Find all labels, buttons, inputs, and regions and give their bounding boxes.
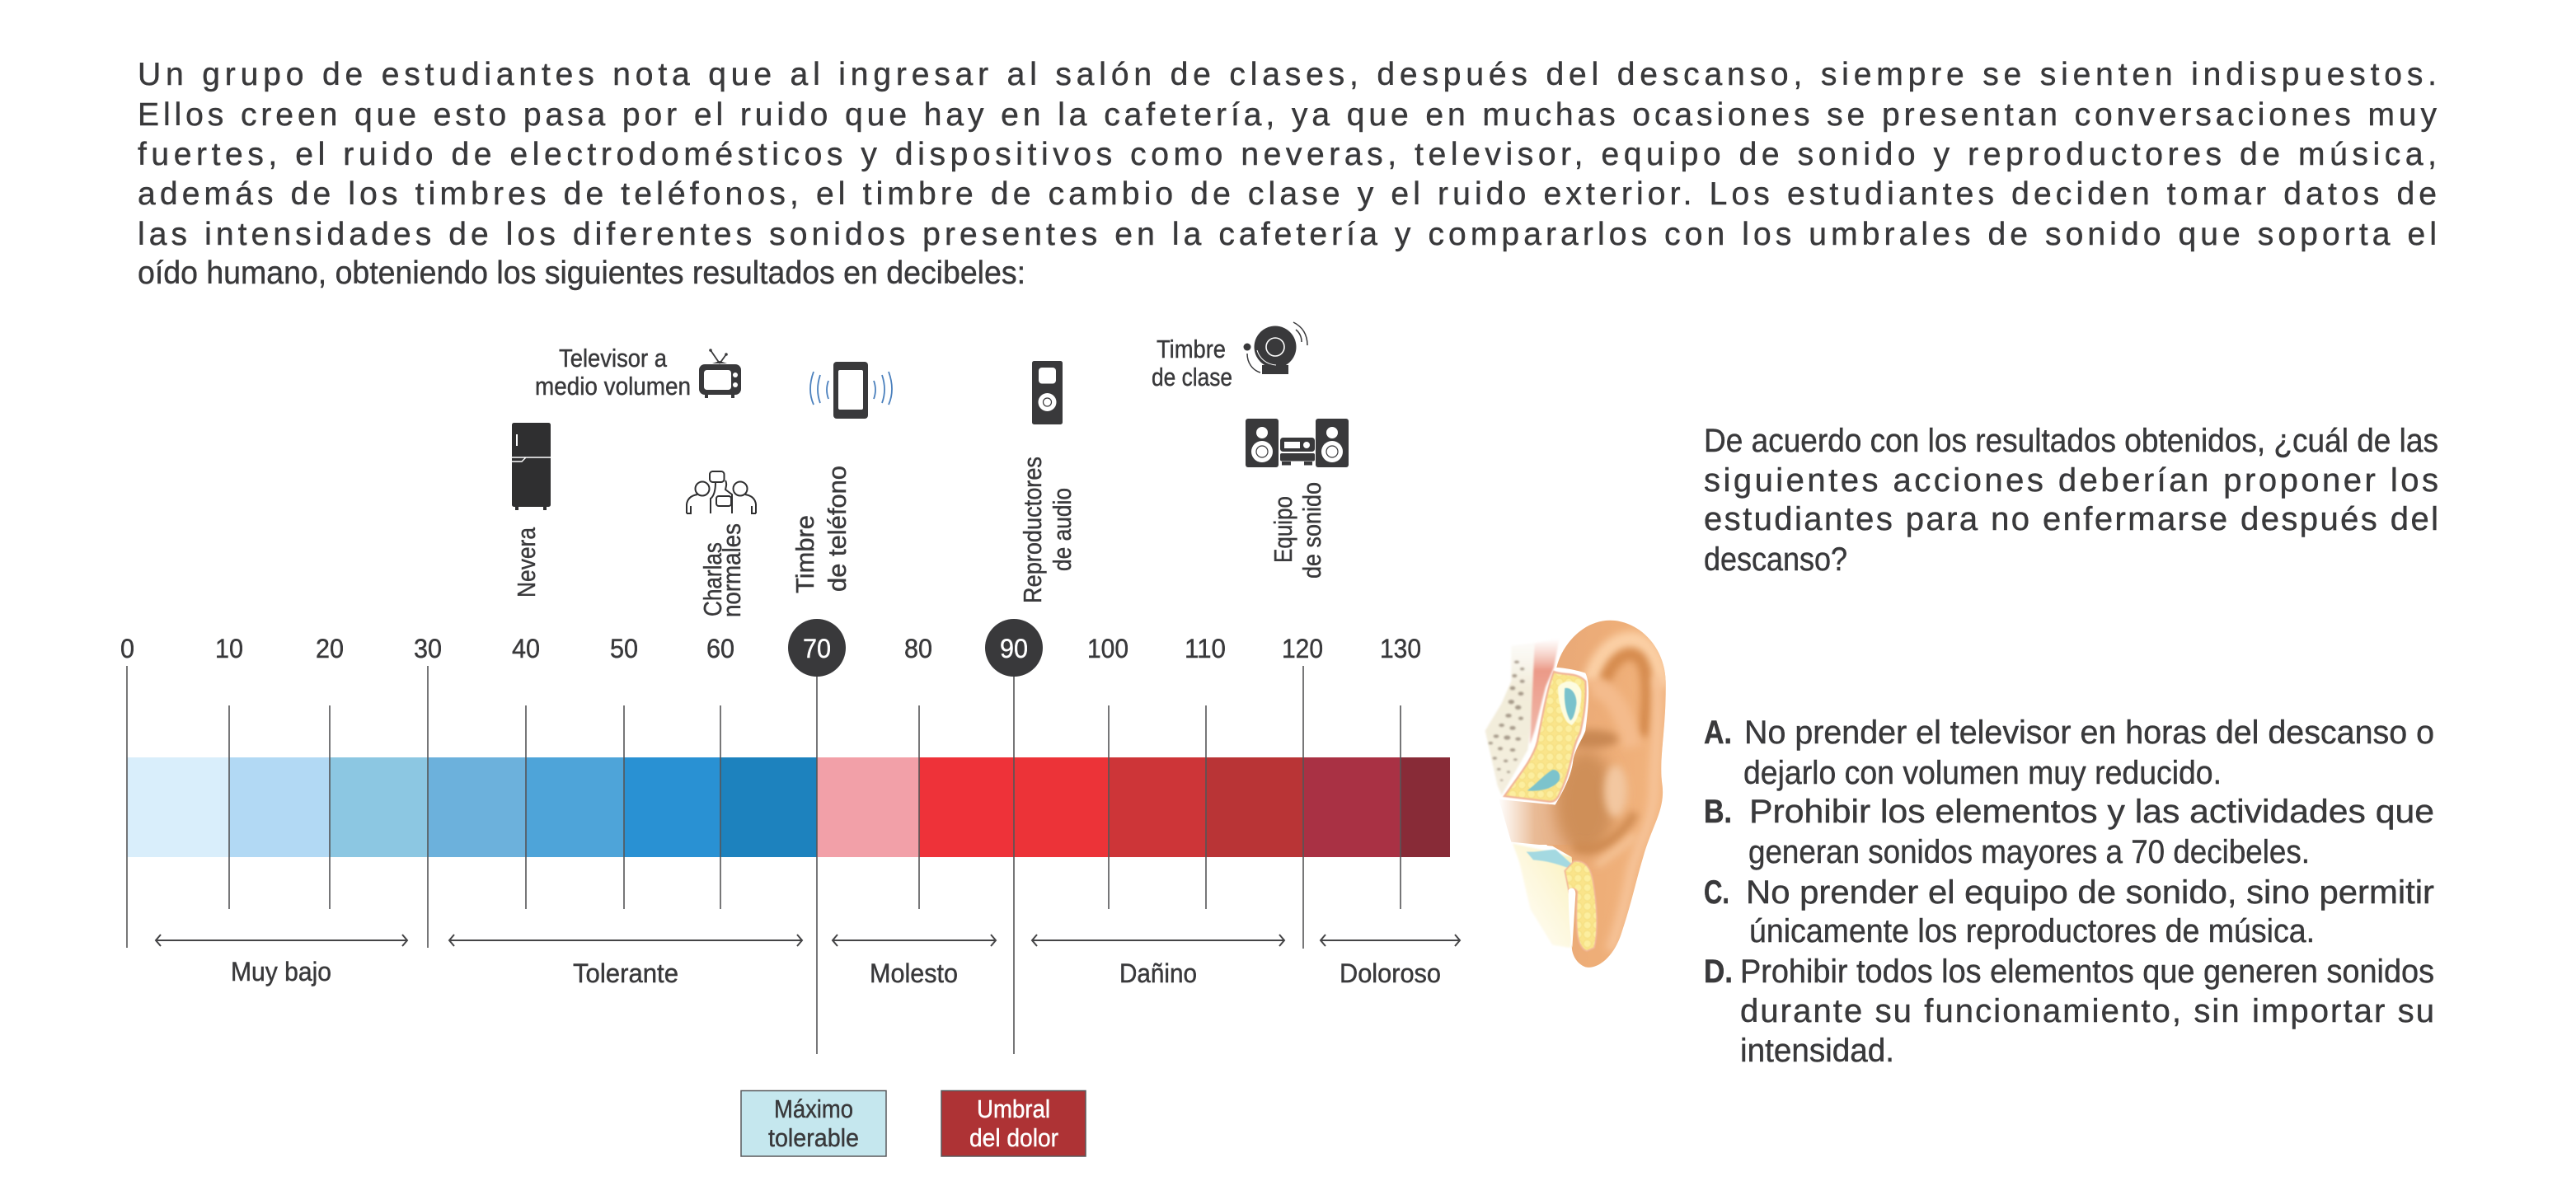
- icon: people talking: [687, 471, 756, 513]
- scale numbers: 50: [610, 634, 638, 663]
- scale numbers: 100: [1087, 634, 1128, 663]
- icon: ringing phone: [810, 362, 892, 419]
- option A: [1704, 715, 2434, 791]
- label: Charlas normales: normales: [717, 523, 746, 617]
- scale numbers: 0: [120, 634, 134, 663]
- intro paragraph: las intensidades de los diferentes sonidos presentes en la cafetería y compararlos con los umbrales de sonido que soporta el: [138, 217, 2437, 252]
- label: Reproductores de audio: Reproductores: [1018, 457, 1047, 603]
- question text: descanso?: [1704, 541, 1847, 578]
- legend box: maximum tolerable: tolerable: [768, 1123, 859, 1152]
- intro paragraph: fuertes, el ruido de electrodomésticos y dispositivos como neveras, televisor, equipo de sonido y reproductores de música,: [138, 137, 2437, 172]
- label: Timbre de teléfono: Timbre: [791, 515, 819, 593]
- scale numbers: 80: [904, 634, 932, 663]
- legend box: pain threshold: [941, 1091, 1086, 1156]
- label: Timbre de clase: de clase: [1152, 363, 1232, 391]
- scale numbers: 120: [1282, 634, 1323, 663]
- scale numbers: 10: [215, 634, 243, 663]
- label: Televisor a medio volumen: Televisor a: [559, 344, 668, 373]
- scale numbers: 130: [1380, 634, 1421, 663]
- label: Equipo de sonido: [1269, 482, 1326, 579]
- label: Nevera: Nevera: [512, 527, 541, 598]
- option A: dejarlo con volumen muy reducido.: [1743, 755, 2222, 791]
- scale numbers: 60: [706, 634, 734, 663]
- scale tick lines: [127, 666, 1401, 1054]
- scale circles for 70 and 90: [788, 619, 1043, 677]
- scale numbers: 40: [512, 634, 540, 663]
- scale numbers: 110: [1185, 634, 1226, 663]
- range labels: Dañino: [1119, 958, 1197, 988]
- option A: A.: [1704, 715, 1732, 751]
- label: Reproductores de audio: [1018, 457, 1077, 603]
- illustration: ear cross-section: [1485, 616, 1673, 972]
- legend box: maximum tolerable: [741, 1091, 886, 1156]
- decibel colour bar: [127, 757, 1450, 857]
- intro paragraph: Un grupo de estudiantes nota que al ingresar al salón de clases, después del descanso, siempre se sienten indispuestos.: [138, 57, 2437, 92]
- scale numbers: 70: [803, 634, 831, 663]
- intro paragraph: oído humano, obteniendo los siguientes resultados en decibeles:: [138, 255, 1025, 291]
- icon: refrigerator: [512, 423, 551, 510]
- scale numbers: 30: [414, 634, 442, 663]
- label: Charlas normales: Charlas: [698, 542, 727, 616]
- option C: No prender el equipo de sonido, sino permitir: [1746, 874, 2434, 911]
- option C: únicamente los reproductores de música.: [1749, 913, 2315, 949]
- range labels: Molesto: [870, 958, 958, 988]
- range labels: Doloroso: [1340, 958, 1441, 988]
- range arrows: [156, 935, 1460, 946]
- range labels: [231, 957, 1441, 988]
- label: Equipo de sonido: de sonido: [1297, 482, 1326, 579]
- icon: television: [699, 349, 741, 398]
- scale numbers: [120, 634, 1421, 663]
- legend box: maximum tolerable: Máximo: [774, 1094, 853, 1123]
- option B: B.: [1704, 794, 1732, 830]
- option B: Prohibir los elementos y las actividades que: [1749, 794, 2434, 830]
- answer options: [1704, 715, 2434, 1069]
- scale numbers: 20: [316, 634, 344, 663]
- label: Timbre de clase: [1152, 335, 1232, 391]
- option D: [1704, 954, 2434, 1069]
- option A: No prender el televisor en horas del descanso o: [1744, 715, 2434, 751]
- option B: generan sonidos mayores a 70 decibeles.: [1748, 834, 2310, 870]
- label: Televisor a medio volumen: medio volumen: [535, 372, 691, 401]
- label: Timbre de teléfono: de teléfono: [823, 466, 852, 592]
- option D: Prohibir todos los elementos que generen sonidos: [1740, 954, 2434, 990]
- legend box: pain threshold: del dolor: [969, 1123, 1058, 1152]
- icon: audio player: [1032, 361, 1063, 424]
- option C: C.: [1704, 874, 1729, 911]
- question text: estudiantes para no enfermarse después del: [1704, 501, 2438, 537]
- label: Timbre de teléfono: [791, 466, 852, 593]
- label: Equipo de sonido: Equipo: [1269, 496, 1297, 563]
- question text: De acuerdo con los resultados obtenidos, ¿cuál de las: [1704, 423, 2438, 459]
- label: Reproductores de audio: de audio: [1048, 488, 1077, 571]
- question text: siguientes acciones deberían proponer los: [1704, 462, 2438, 499]
- option B: [1704, 794, 2434, 870]
- range labels: Tolerante: [573, 958, 678, 988]
- range labels: Muy bajo: [231, 957, 331, 986]
- scale numbers: 90: [1000, 634, 1028, 663]
- option D: intensidad.: [1740, 1033, 1894, 1069]
- option C: [1704, 874, 2434, 949]
- label: Televisor a medio volumen: [535, 344, 691, 401]
- intro paragraph: además de los timbres de teléfonos, el timbre de cambio de clase y el ruido exterior. Los estudiantes deciden tomar datos de: [138, 176, 2437, 212]
- icon: school bell: [1243, 322, 1307, 374]
- label: Charlas normales: [698, 523, 746, 617]
- intro paragraph: [138, 57, 2437, 291]
- icon: sound system: [1246, 419, 1349, 467]
- intro paragraph: Ellos creen que esto pasa por el ruido que hay en la cafetería, ya que en muchas ocasiones se presentan conversaciones muy: [138, 97, 2437, 133]
- legend box: pain threshold: Umbral: [977, 1094, 1050, 1123]
- option D: durante su funcionamiento, sin importar su: [1740, 993, 2434, 1029]
- question text: [1704, 423, 2438, 578]
- label: Timbre de clase: Timbre: [1157, 335, 1226, 363]
- option D: D.: [1704, 954, 1733, 990]
